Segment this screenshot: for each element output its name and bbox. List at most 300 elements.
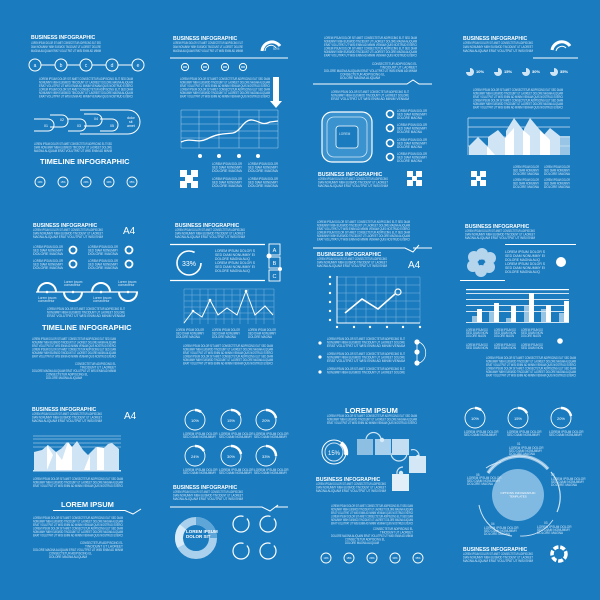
heading: BUSINESS INFOGRAPHIC: [173, 485, 238, 491]
panel: top-left timeline page: [29, 35, 144, 187]
semicircle timeline: Lorem ipsum: [93, 296, 112, 300]
text block: NONUMMY NIBH EUISMOD TINCIDUNT UT LAOREET DOLORE MAGNA ALIQUAM: [180, 80, 270, 84]
text blocks: DOLORE MAGNA: [544, 172, 571, 176]
heading: TIMELINE INFOGRAPHIC: [40, 157, 130, 166]
bullet list: ERAT VOLUTPAT UT WISI ENIM AD MINIM VENIAM: [327, 359, 405, 363]
panel: bottom puzzle steps page: [316, 406, 426, 563]
33% box: DOLORE MAGNA ALIQ: [215, 269, 251, 273]
panel: middle-left timeline page: LOREM IPSUM DOLOR SIT AMET CONSECTETUR ADIPISCING: [33, 228, 103, 232]
percent circles: [35, 177, 137, 187]
33% box: DOLORE MAGNA ALIQ: [215, 257, 251, 261]
arrow: down: [270, 77, 282, 108]
text blocks: LOREM IPSUM DOLOR: [212, 328, 241, 332]
bullet list: LOREM IPSUM DOLOR SIT AMET CONSECTETUR ADIPISCING ELIT: [327, 352, 405, 356]
text block: DOLORE MAGNA ALIQUAM ERAT VOLUTPAT UT WISI ENIM AD MINIM: [32, 369, 116, 373]
icons: small circles: [181, 63, 247, 71]
list with ring icons: SED DIAM NONUMMY: [397, 156, 428, 160]
pie icons: 30%: [532, 69, 540, 74]
text blocks: SED DIAM NONUMMY: [544, 182, 571, 186]
text block: CONSECTETUR ADIPISCING EL: [75, 362, 116, 366]
ring list: SED DIAM NONUMMY: [88, 262, 119, 266]
text block: ERAT VOLUTPAT UT WISI ENIM AD MINIM VENIAM QUIS NOSTRUD EXERCI: [180, 84, 270, 88]
text block: DOLORE MAGNA ALIQUAM ERAT VOLUTPAT UT WISI ENIM AD MINIM: [324, 69, 417, 73]
chain timeline: dolor: [127, 116, 136, 120]
percent rings: SED DIAM NONUMMY: [464, 433, 498, 437]
text blocks: DOLORE MAGNA: [212, 184, 243, 188]
panel: middle 33% page: MAGNA ALIQUAM ERAT VOLUTPAT UT WISI ENIM: [175, 235, 245, 239]
dots: [198, 154, 260, 158]
options circle diagram: DOLORE MAGNA: [551, 483, 578, 487]
options circle diagram: SED DIAM NONUMMY: [509, 449, 543, 453]
panel: middle 33% page: ERAT VOLUTPAT UT WISI ENIM AD MINIM VENIAM QUIS NOSTRUD EXERCI: [183, 351, 273, 355]
panel: middle 33% page: LOREM IPSUM DOLOR SIT AMET CONSECTETUR ADIPISCING: [175, 228, 245, 232]
33% box: LOREM IPSUM DOLOR S: [215, 261, 255, 265]
bullet list: ERAT VOLUTPAT UT WISI ENIM AD MINIM VENIAM: [327, 344, 405, 348]
panel: middle 33% page: LOREM IPSUM DOLOR SIT AMET CONSECTETUR ADIPISCING ELIT SED DIAM: [183, 344, 273, 348]
text block: DOLORE MAGNA ALIQUAM: [345, 541, 379, 545]
percent circles: 20%: [83, 180, 89, 184]
list with ring icons: LOREM IPSUM DOLOR: [397, 109, 428, 113]
text blocks: LOREM IPSUM DOLOR: [248, 177, 279, 181]
text block: LOREM IPSUM DOLOR SIT AMET CONSECTETUR ADIPISCING ELIT SED: [34, 142, 112, 146]
text blocks: SED DIAM NONUMMY: [513, 168, 540, 172]
panel: middle-right bar chart page: SED DIAM NON: [521, 346, 544, 350]
percent rings: LOREM IPSUM DOLOR: [254, 468, 289, 472]
percent rings: 15%: [227, 418, 235, 423]
step circles a-e: [29, 59, 144, 71]
text blocks: LOREM IPSUM DOLOR: [513, 165, 540, 169]
panel: middle-right bar chart page: DOLORE MAGNA ALIQ: [505, 258, 541, 262]
text block: NONUMMY NIBH EUISMOD TINCIDUNT UT LAOREET DOLORE MAGNA ALIQUAM: [39, 80, 133, 84]
options circle diagram: LOREM IPSUM DOLOR: [467, 476, 502, 480]
panel: middle-left timeline page: [32, 223, 138, 380]
text block: LOREM IPSUM DOLOR SIT AMET CONSECTETUR ADIPISCING ELIT: [173, 41, 243, 45]
text block: CONSECTETUR ADIPISCING EL: [340, 72, 385, 76]
text block: LOREM IPSUM DOLOR SIT AMET CONSECTETUR ADIPISCING ELIT SED DIAM: [331, 514, 413, 518]
text blocks: DOLORE MAGNA: [248, 335, 273, 339]
text blocks: SED DIAM NONUMMY: [248, 166, 279, 170]
panel: middle line chart A4 page: NONUMMY NIBH EUISMOD TINCIDUNT UT LAOREET DOLORE MAGNA ALIQUAM: [317, 224, 410, 228]
pie icons: 15%: [504, 69, 512, 74]
options circle diagram: 02: [551, 473, 555, 477]
panel: middle-right bar chart page: LOREM IPSUM DO: [521, 328, 543, 332]
bar chart: [466, 289, 569, 323]
text block: ERAT VOLUTPAT UT WISI ENIM AD MINIM VENIAM QUIS NOSTRUD EXERCI: [473, 106, 563, 110]
text blocks: SED DIAM NONUMMY: [176, 332, 205, 336]
heading: BUSINESS INFOGRAPHIC: [317, 252, 382, 258]
panel: middle-right bar chart page: LOREM IPSUM DO: [494, 328, 516, 332]
panel: bottom-left area chart page: ERAT VOLUTPAT UT WISI ENIM AD MINIM VENIAM QUIS NOSTRUD EXERCI: [33, 484, 123, 488]
text block: DOLORE MAGNA ALIQUAM: [46, 376, 82, 380]
bullet list: NONUMMY NIBH EUISMOD TINCIDUNT UT LAOREET DOLORE: [327, 356, 405, 360]
ring list: DOLORE MAGNA: [33, 252, 64, 256]
panel: middle-right bar chart page: SED DIAM NON: [521, 331, 544, 335]
panel: middle-right bar chart page: ERAT VOLUTPAT UT WISI ENIM AD MINIM VENIAM QUIS NOSTRUD EXERCI: [486, 374, 576, 378]
panel: bottom rings and donut page: LOREM IPSUM DOLOR SIT AMET CONSECTETUR ADIPISCING: [173, 490, 243, 494]
panel: middle-right bar chart page: DIAM NONUMMY NIBH EUISMOD TINCIDUNT UT LAOREET: [465, 232, 535, 236]
heading: TIMELINE INFOGRAPHIC: [42, 323, 132, 332]
panel: middle-left timeline page: MAGNA ALIQUAM ERAT VOLUTPAT UT WISI ENIM: [33, 235, 103, 239]
text block: MAGNA ALIQUAM ERAT VOLUTPAT UT WISI ENIM AD MINIM: [31, 49, 101, 53]
puzzle squares: [357, 432, 426, 491]
icon: flower: [407, 171, 422, 186]
list with ring icons: DOLORE MAGNA: [397, 116, 423, 120]
text block: TINCIDUNT UT LAOREET: [380, 66, 417, 70]
percent rings: 24%: [191, 454, 199, 459]
ABC boxes: [266, 244, 282, 281]
options circle diagram: [467, 442, 586, 536]
panel: middle line chart A4 page: LOREM IPSUM DOLOR SIT AMET CONSECTETUR ADIPISCING ELIT SED DIAM: [317, 230, 410, 234]
text block: NONUMMY NIBH EUISMOD TINCIDUNT UT LAOREET DOLORE MAGNA ALIQUAM: [180, 91, 270, 95]
panel: middle-right bar chart page: SED DIAM NON: [466, 346, 489, 350]
percent rings: LOREM IPSUM DOLOR: [254, 432, 289, 436]
ring list: SED DIAM NONUMMY: [33, 248, 64, 252]
panel: middle line chart A4 page: ERAT VOLUTPAT UT WISI ENIM AD MINIM VENIAM QUIS NOSTRUD EXERCI: [317, 227, 410, 231]
text block: NONUMMY NIBH EUISMOD TINCIDUNT UT LAOREET DOLORE MAGNA ALIQUAM: [331, 518, 413, 522]
ring list: [33, 245, 132, 270]
panel: middle line chart A4 page: MAGNA ALIQUAM ERAT VOLUTPAT UT WISI ENIM: [317, 264, 387, 268]
panel: bottom-right options circle page: DIAM NONUMMY NIBH EUISMOD TINCIDUNT UT LAOREET: [463, 556, 533, 560]
percent circles: [321, 553, 423, 563]
panel: middle-right bar chart page: SED DIAM NON: [466, 331, 489, 335]
text block: LOREM IPSUM DOLOR SIT AMET CONSECTETUR ADIPISCING ELIT SED DIAM: [180, 88, 270, 92]
semicircle timeline: consectetur: [118, 283, 135, 287]
panel: middle-right bar chart page: DOLORE MAGN: [466, 334, 487, 338]
donut chart: LOREM IPSUM: [186, 529, 218, 534]
text block: CONSECTETUR ADIPISCING EL: [80, 541, 123, 545]
percent rings: [464, 408, 584, 437]
text blocks: LOREM IPSUM DOLOR: [212, 177, 243, 181]
33% box: [170, 244, 265, 280]
text block: NONUMMY NIBH EUISMOD TINCIDUNT UT LAOREET DOLORE MAGNA ALIQUAM: [32, 351, 116, 355]
percent circles: 35%: [415, 556, 421, 560]
pie icons: 10%: [476, 69, 484, 74]
heading: LOREM IPSUM: [345, 406, 398, 415]
heading: BUSINESS INFOGRAPHIC: [463, 36, 528, 42]
icon: gauge: [552, 42, 570, 51]
ring list: LOREM IPSUM DOLOR: [33, 245, 64, 249]
text block: NONUMMY NIBH EUISMOD TINCIDUNT UT LAOREET DOLORE MAGNA ALIQUAM: [32, 340, 116, 344]
text block: ERAT VOLUTPAT UT WISI ENIM AD MINIM VENIAM QUIS NOSTRUD EXERCI: [324, 43, 417, 47]
bullet list: NONUMMY NIBH EUISMOD TINCIDUNT UT LAOREET DOLORE: [327, 340, 405, 344]
panel: middle 33% page: ERAT VOLUTPAT UT WISI ENIM AD MINIM VENIAM QUIS NOSTRUD EXERCI: [183, 362, 273, 366]
text blocks: DOLORE MAGNA: [513, 185, 540, 189]
panel: bottom puzzle steps page: ERAT VOLUTPAT UT WISI ENIM AD MINIM VENIAM QUIS NOSTRUD EXERCI: [327, 421, 417, 425]
ring list: DOLORE MAGNA: [33, 266, 64, 270]
panel: middle 33% page: NONUMMY NIBH EUISMOD TINCIDUNT UT LAOREET DOLORE MAGNA ALIQUAM: [183, 348, 273, 352]
panel: middle-right bar chart page: LOREM IPSUM DO: [466, 343, 488, 347]
percent rings: LOREM IPSUM DOLOR: [549, 430, 584, 434]
text block: LOREM IPSUM DOLOR SIT AMET CONSECTETUR ADIPISCING ELIT SED DIAM: [33, 526, 123, 530]
percent rings: SED DIAM NONUMMY: [219, 471, 253, 475]
icon: segmented ring: [552, 547, 566, 561]
heading: BUSINESS INFOGRAPHIC: [175, 223, 240, 229]
panel: middle 33% page: NONUMMY NIBH EUISMOD TINCIDUNT UT LAOREET DOLORE MAGNA ALIQUAM: [183, 358, 273, 362]
panel: middle-right bar chart page: SED DIAM NONUMMY EI: [505, 266, 545, 270]
icon: gauge: 50%: [273, 47, 280, 51]
zigzag chart: [184, 289, 274, 324]
percent rings: SED DIAM NONUMMY: [507, 433, 541, 437]
percent circles: 15%: [60, 180, 66, 184]
text blocks: SED DIAM NONUMMY: [513, 182, 540, 186]
bullet list: NONUMMY NIBH EUISMOD TINCIDUNT UT LAOREET DOLORE: [327, 370, 405, 374]
small rings: [233, 516, 276, 559]
text block: LOREM IPSUM DOLOR SIT AMET CONSECTETUR ADIPISCING ELIT SED DIAM: [39, 77, 133, 81]
list with ring icons: LOREM IPSUM DOLOR: [397, 152, 428, 156]
heading: BUSINESS INFOGRAPHIC: [316, 477, 381, 483]
options circle diagram: 03: [544, 521, 548, 525]
panel: middle-right bar chart page: SED DIAM NON: [494, 346, 517, 350]
text block: DOLORE MAGNA ALIQUAM: [340, 76, 380, 80]
ring list: SED DIAM NONUMMY: [33, 262, 64, 266]
options circle diagram: LOREM IPSUM DOLOR: [551, 477, 586, 481]
panel: bottom puzzle steps page: LOREM IPSUM DOLOR SIT AMET CONSECTETUR ADIPISCING: [316, 482, 386, 486]
ring list: LOREM IPSUM DOLOR: [88, 245, 119, 249]
ABC boxes: C: [273, 274, 277, 280]
options circle diagram: 01: [517, 442, 521, 446]
text block: LOREM IPSUM DOLOR SIT AMET CONSECTETUR ADIPISCING ELIT SED DIAM: [32, 337, 116, 341]
donut chart: [179, 521, 218, 555]
panel: middle line chart A4 page: [313, 220, 432, 374]
panel: middle-right bar chart page: MAGNA ALIQUAM ERAT VOLUTPAT UT WISI ENIM: [465, 236, 535, 240]
panel: middle line chart A4 page: ERAT VOLUTPAT UT WISI ENIM AD MINIM VENIAM QUIS NOSTRUD EXERCI: [317, 238, 410, 242]
panel: middle-right bar chart page: ERAT VOLUTPAT UT WISI ENIM AD MINIM VENIAM QUIS NOSTRUD EXERCI: [486, 363, 576, 367]
ring list: DOLORE MAGNA: [88, 252, 119, 256]
percent circles: 15%: [346, 556, 352, 560]
step circles a-e: b: [60, 63, 63, 69]
text blocks: SED DIAM NONUMMY: [248, 180, 279, 184]
text block: LOREM IPSUM DOLOR SIT AMET CONSECTETUR ADIPISCING ELIT: [331, 90, 409, 94]
icon: petal flower: [467, 248, 496, 277]
ABC boxes: B: [273, 261, 277, 267]
text block: ERAT VOLUTPAT UT WISI ENIM AD MINIM VENIAM QUIS NOSTRUD EXERCI: [32, 354, 116, 358]
line chart: [181, 110, 278, 148]
text blocks: DOLORE MAGNA: [544, 185, 571, 189]
15% ring: 15%: [328, 451, 341, 457]
step circles a-e: e: [137, 63, 140, 69]
pie icons: 35%: [560, 69, 568, 74]
options circle diagram: DOLORE MAGNA: [467, 482, 494, 486]
panel: bottom puzzle steps page: MAGNA ALIQUAM ERAT VOLUTPAT UT WISI ENIM: [316, 489, 386, 493]
chain timeline: sit: [129, 120, 133, 124]
panel: bottom-left area chart page: DIAM NONUMMY NIBH EUISMOD TINCIDUNT UT LAOREET: [32, 416, 102, 420]
options circle diagram: SED DIAM NONUMMY: [484, 529, 518, 533]
chain timeline: 02: [60, 118, 64, 122]
text blocks: SED DIAM NONUMMY: [212, 332, 241, 336]
text blocks: DOLORE MAGNA: [513, 172, 540, 176]
33% box: 33%: [182, 261, 196, 268]
percent rings: LOREM IPSUM DOLOR: [219, 468, 254, 472]
text blocks: LOREM IPSUM DOLOR: [248, 328, 277, 332]
percent rings: LOREM IPSUM DOLOR: [183, 432, 218, 436]
text block: TINCIDUNT UT LAOREET: [380, 530, 413, 534]
line chart: [329, 276, 421, 328]
panel: middle-right bar chart page: DOLORE MAGN: [494, 334, 515, 338]
percent rings: 20%: [262, 418, 270, 423]
text block: DOLORE MAGNA ALIQUAM ERAT VOLUTPAT UT WISI ENIM AD MINIM: [33, 548, 123, 552]
text block: LOREM IPSUM DOLOR SIT AMET CONSECTETUR ADIPISCING ELIT SED: [31, 41, 101, 45]
semicircle timeline: Lorem ipsum: [118, 280, 137, 284]
icon: flower: [471, 171, 486, 186]
heading: BUSINESS INFOGRAPHIC: [463, 547, 528, 553]
panel: middle-right bar chart page: LOREM IPSUM DOLOR SIT AMET CONSECTETUR ADIPISCING: [465, 229, 535, 233]
panel: middle-left timeline page: LOREM IPSUM DOLOR SIT AMET CONSECTETUR ADIPISCING ELIT: [47, 307, 125, 311]
panel: middle-left timeline page: ERAT VOLUTPAT UT WISI ENIM AD MINIM VENIAM: [47, 314, 125, 318]
panel: bottom-left area chart page: NONUMMY NIBH EUISMOD TINCIDUNT UT LAOREET DOLORE MAGNA ALIQUAM: [33, 480, 123, 484]
step circles a-e: d: [111, 63, 114, 69]
text block: ERAT VOLUTPAT UT WISI ENIM AD MINIM VENIAM QUIS NOSTRUD EXERCI: [180, 94, 270, 98]
percent circles: 20%: [369, 556, 375, 560]
options circle diagram: DOLORE MAGNA: [537, 531, 564, 535]
list with ring icons: SED DIAM NONUMMY: [397, 142, 428, 146]
panel: middle 33% page: [170, 223, 282, 366]
chain timeline: amet: [127, 124, 135, 128]
step circles a-e: a: [34, 63, 37, 69]
panel: bottom puzzle steps page: NONUMMY NIBH EUISMOD TINCIDUNT UT LAOREET DOLORE MAGNA ALIQUAM: [327, 418, 417, 422]
ring list: LOREM IPSUM DOLOR: [33, 259, 64, 263]
panel: top puzzle page: DIAM NONUMMY NIBH EUISMOD TINCIDUNT UT LAOREET: [318, 180, 388, 184]
text block: DIAM NONUMMY NIBH EUISMOD TINCIDUNT UT LAOREET DOLORE: [173, 45, 243, 49]
ring list: DOLORE MAGNA: [88, 266, 119, 270]
text block: TINCIDUNT UT LAOREET: [85, 544, 123, 548]
percent rings: [183, 410, 289, 475]
text block: MAGNA ALIQUAM ERAT VOLUTPAT UT WISI ENIM AD MINIM: [34, 149, 112, 153]
text blocks: SED DIAM NONUMMY: [212, 166, 243, 170]
options circle diagram: TEMPLATES: [509, 494, 527, 498]
ring list: LOREM IPSUM DOLOR: [88, 259, 119, 263]
percent circles: 30%: [392, 556, 398, 560]
heading: BUSINESS INFOGRAPHIC: [173, 36, 238, 42]
percent rings: SED DIAM NONUMMY: [549, 433, 583, 437]
text block: LOREM IPSUM DOLOR SIT AMET CONSECTETUR ADIPISCING ELIT SED DIAM: [324, 46, 417, 50]
list with ring icons: DOLORE MAGNA: [397, 130, 423, 134]
text block: NONUMMY NIBH EUISMOD TINCIDUNT UT LAOREET DOLORE MAGNA ALIQUAM: [33, 520, 123, 524]
33% box: SED DIAM NONUMMY EI: [215, 265, 255, 269]
panel: middle-right bar chart page: DOLORE MAGNA ALIQ: [505, 270, 541, 274]
panel: middle line chart A4 page: LOREM IPSUM DOLOR SIT AMET CONSECTETUR ADIPISCING: [317, 257, 387, 261]
text block: DOLORE MAGNA ALIQUAM ERAT VOLUTPAT UT WISI ENIM AD MINIM: [331, 534, 413, 538]
text block: ERAT VOLUTPAT UT WISI ENIM AD MINIM VENIAM QUIS NOSTRUD EXERCI: [324, 54, 417, 58]
semicircle timeline: consectetur: [64, 283, 81, 287]
text blocks: DOLORE MAGNA: [248, 184, 279, 188]
list with ring icons: DOLORE MAGNA: [397, 145, 423, 149]
list with ring icons: LOREM IPSUM DOLOR: [397, 138, 428, 142]
text blocks: DOLORE MAGNA: [248, 169, 279, 173]
panel: bottom-right options circle page: [463, 408, 586, 563]
text block: ERAT VOLUTPAT UT WISI ENIM AD MINIM VENIAM QUIS NOSTRUD EXERCI: [331, 511, 413, 515]
percent rings: LOREM IPSUM DOLOR: [219, 432, 254, 436]
bullet list: LOREM IPSUM DOLOR SIT AMET CONSECTETUR ADIPISCING ELIT: [327, 367, 405, 371]
panel: middle line chart A4 page: LOREM IPSUM DOLOR SIT AMET CONSECTETUR ADIPISCING ELIT SED DIAM: [317, 220, 410, 224]
semicircle timeline: consectetur: [38, 299, 55, 303]
A4 label: A4: [124, 411, 137, 422]
heading: BUSINESS INFOGRAPHIC: [31, 35, 96, 41]
text blocks: SED DIAM NONUMMY: [248, 332, 277, 336]
panel: top-right area chart page: [463, 36, 578, 189]
panel: bottom puzzle steps page: DIAM NONUMMY NIBH EUISMOD TINCIDUNT UT LAOREET: [316, 486, 386, 490]
bullet list: LOREM IPSUM DOLOR SIT AMET CONSECTETUR ADIPISCING ELIT: [327, 337, 405, 341]
text block: LOREM IPSUM DOLOR SIT AMET CONSECTETUR ADIPISCING ELIT SED DIAM: [473, 98, 563, 102]
panel: middle-right bar chart page: LOREM IPSUM DO: [521, 343, 543, 347]
panel: bottom-left area chart page: LOREM IPSUM DOLOR SIT AMET CONSECTETUR ADIPISCING: [32, 412, 102, 416]
text block: ERAT VOLUTPAT UT WISI ENIM AD MINIM VENIAM: [331, 97, 409, 101]
area chart: [468, 118, 570, 155]
icon: puzzle square: LOREM: [339, 132, 351, 136]
text blocks: DOLORE MAGNA: [212, 335, 237, 339]
text block: ERAT VOLUTPAT UT WISI ENIM AD MINIM VENIAM QUIS NOSTRUD EXERCI: [473, 95, 563, 99]
pie icons: [466, 68, 568, 76]
percent circles: 10%: [37, 180, 43, 184]
text block: DOLORE MAGNA ALIQUAM: [49, 555, 87, 559]
chain timeline: [34, 110, 140, 134]
panel: top puzzle page: [313, 36, 432, 188]
panel: bottom-left area chart page: MAGNA ALIQUAM ERAT VOLUTPAT UT WISI ENIM: [32, 419, 102, 423]
percent rings: LOREM IPSUM DOLOR: [507, 430, 542, 434]
panel: middle-right bar chart page: SED DIAM NON: [494, 331, 517, 335]
icon: puzzle square: [322, 112, 372, 162]
text block: LOREM IPSUM DOLOR SIT AMET CONSECTETUR ADIPISCING ELIT SED DIAM: [33, 516, 123, 520]
panel: bottom rings and donut page: DIAM NONUMMY NIBH EUISMOD TINCIDUNT UT LAOREET: [173, 494, 243, 498]
percent rings: SED DIAM NONUMMY: [183, 435, 217, 439]
list with ring icons: SED DIAM NONUMMY: [397, 126, 428, 130]
panel: bottom-right options circle page: MAGNA ALIQUAM ERAT VOLUTPAT UT WISI ENIM: [463, 559, 533, 563]
bullet list: [318, 337, 405, 374]
list with ring icons: LOREM IPSUM DOLOR: [397, 123, 428, 127]
text block: ERAT VOLUTPAT UT WISI ENIM AD MINIM VENIAM QUIS NOSTRUD EXERCI: [33, 523, 123, 527]
text blocks: LOREM IPSUM DOLOR: [513, 178, 540, 182]
chain timeline: 05: [110, 124, 114, 128]
text block: NONUMMY NIBH EUISMOD TINCIDUNT UT LAOREET DOLORE MAGNA ALIQUAM: [33, 530, 123, 534]
text block: NONUMMY NIBH EUISMOD TINCIDUNT UT LAOREET DOLORE MAGNA ALIQUAM: [473, 92, 563, 96]
list with ring icons: SED DIAM NONUMMY: [397, 112, 428, 116]
percent rings: 10%: [191, 418, 199, 423]
percent circles: 10%: [323, 556, 329, 560]
area chart: [33, 436, 121, 472]
text blocks: SED DIAM NONUMMY: [544, 168, 571, 172]
A4 label: A4: [408, 260, 421, 271]
panel: bottom rings and donut page: MAGNA ALIQUAM ERAT VOLUTPAT UT WISI ENIM: [173, 497, 243, 501]
text block: ERAT VOLUTPAT UT WISI ENIM AD MINIM VENIAM QUIS NOSTRUD EXERCI: [331, 522, 413, 526]
options circle diagram: SED DIAM NONUMMY: [467, 479, 501, 483]
panel: bottom-left area chart page: LOREM IPSUM DOLOR SIT AMET CONSECTETUR ADIPISCING ELIT SED DIAM: [33, 477, 123, 481]
text block: LOREM IPSUM DOLOR SIT AMET CONSECTETUR ADIPISCING ELIT SED DIAM: [324, 36, 417, 40]
semicircle timeline: [36, 280, 138, 303]
panel: middle line chart A4 page: DIAM NONUMMY NIBH EUISMOD TINCIDUNT UT LAOREET: [317, 260, 387, 264]
chain timeline: 04: [94, 117, 98, 121]
text block: LOREM IPSUM DOLOR SIT AMET CONSECTETUR ADIPISCING ELIT SED DIAM: [39, 88, 133, 92]
heading: BUSINESS INFOGRAPHIC: [465, 224, 530, 230]
panel: middle-right bar chart page: LOREM IPSUM DOLOR S: [505, 250, 545, 254]
text block: NONUMMY NIBH EUISMOD TINCIDUNT UT LAOREET DOLORE MAGNA ALIQUAM: [324, 50, 417, 54]
options circle diagram: 05: [476, 473, 480, 477]
panel: top-right area chart page: MAGNA ALIQUAM ERAT VOLUTPAT UT WISI ENIM: [463, 49, 533, 53]
percent rings: SED DIAM NONUMMY: [254, 471, 288, 475]
panel: middle-left timeline page: NONUMMY NIBH EUISMOD TINCIDUNT UT LAOREET DOLORE: [47, 310, 125, 314]
options circle diagram: SED DIAM NONUMMY: [551, 480, 585, 484]
list with ring icons: [386, 109, 428, 163]
options circle diagram: LOREM IPSUM DOLOR: [537, 525, 572, 529]
text blocks: LOREM IPSUM DOLOR: [544, 165, 571, 169]
heading: BUSINESS INFOGRAPHIC: [33, 223, 98, 229]
icon: flower: [180, 170, 198, 188]
text blocks: SED DIAM NONUMMY: [212, 180, 243, 184]
percent rings: LOREM IPSUM DOLOR: [464, 430, 499, 434]
15% ring: [322, 440, 346, 464]
panel: middle-right bar chart page: SED DIAM NONUMMY EI: [505, 254, 545, 258]
list with ring icons: DOLORE MAGNA: [397, 159, 423, 163]
text block: LOREM IPSUM DOLOR SIT AMET CONSECTETUR ADIPISCING ELIT SED DIAM: [32, 348, 116, 352]
percent rings: 10%: [471, 416, 479, 421]
